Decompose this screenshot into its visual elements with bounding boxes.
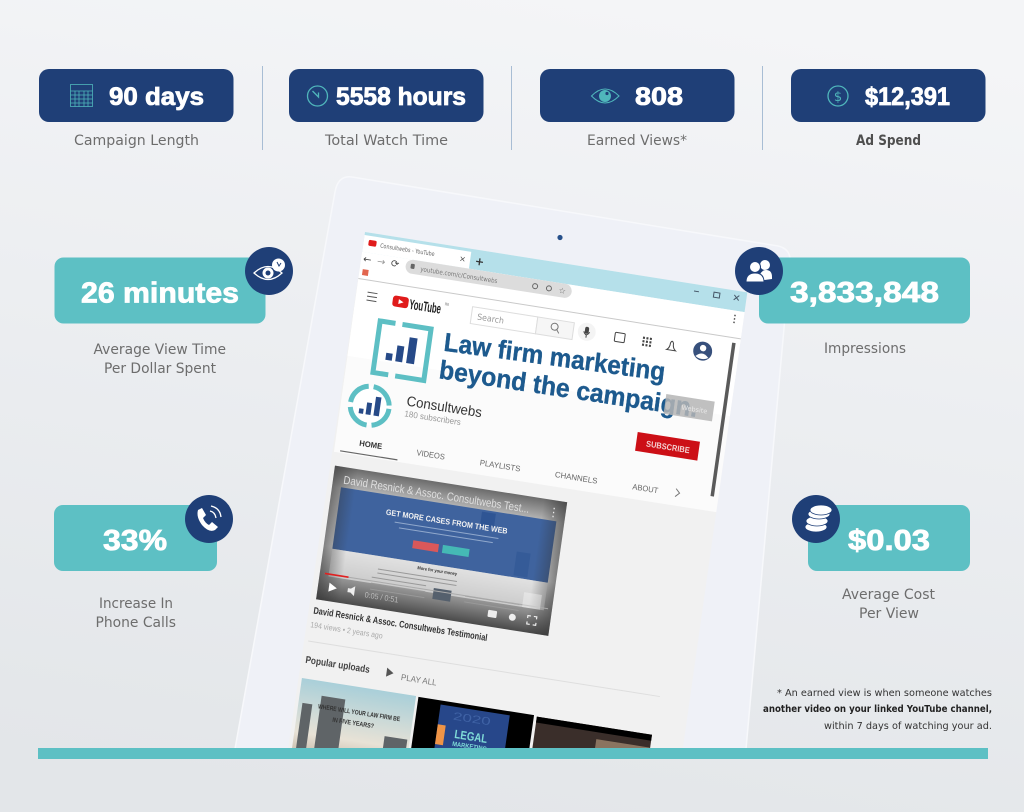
metric: impressions xyxy=(735,247,970,357)
metric: phone calls: Increase In xyxy=(99,596,173,612)
channel tabs: ABOUT xyxy=(632,482,659,495)
banner logo xyxy=(373,321,431,380)
metric: phone calls xyxy=(54,495,233,631)
stat card: campaign length xyxy=(39,69,234,149)
stat card: earned views: 808 xyxy=(635,83,683,111)
metric: cost per view: Average Cost xyxy=(842,587,935,603)
camera dot xyxy=(557,235,563,240)
metric: phone calls: Phone Calls xyxy=(96,615,176,631)
popular uploads heading xyxy=(306,656,436,686)
youtube header xyxy=(358,278,741,361)
banner headline: Law firm marketing xyxy=(442,327,667,387)
bottom band xyxy=(38,748,988,759)
stat card: ad spend xyxy=(791,69,986,149)
channel banner: beyond the campaign. xyxy=(437,354,700,423)
browser chrome: + xyxy=(474,255,485,269)
browser chrome: → xyxy=(376,256,386,268)
icon: dollar coin xyxy=(828,86,848,106)
channel info: Website xyxy=(681,404,708,416)
icon: people xyxy=(735,247,783,295)
scrollbar xyxy=(710,343,736,497)
video title: David Resnick & Assoc. Consultwebs Testimonial xyxy=(313,606,488,644)
video thumbnails: MARKETING xyxy=(452,741,487,753)
metric: view time per dollar xyxy=(54,247,293,377)
metric: view time per dollar: Per Dollar Spent xyxy=(104,361,217,377)
youtube header: IN xyxy=(444,301,449,307)
video thumbnails: LEGAL xyxy=(454,727,488,746)
channel tabs xyxy=(340,440,680,497)
video thumbnails xyxy=(292,678,652,748)
icon: clock xyxy=(308,86,328,106)
video thumbnails: TRENDS xyxy=(450,747,481,761)
channel info xyxy=(348,384,715,461)
metric: phone calls: 33% xyxy=(103,525,167,557)
stat card: campaign length: Campaign Length xyxy=(74,133,199,149)
video player: David Resnick & Assoc. Consultwebs Test... xyxy=(343,475,530,516)
icon: calendar xyxy=(70,84,92,106)
channel tabs: HOME xyxy=(359,439,383,451)
video player: 0:05 / 0:51 xyxy=(364,590,399,605)
footnote: within 7 days of watching your ad. xyxy=(824,721,992,732)
popular uploads heading: PLAY ALL xyxy=(400,672,438,688)
channel tabs: VIDEOS xyxy=(416,448,445,462)
icon: phone xyxy=(185,495,233,543)
channel tabs: CHANNELS xyxy=(554,470,598,486)
stat card: ad spend: Ad Spend xyxy=(856,133,921,149)
channel info: SUBSCRIBE xyxy=(646,438,691,455)
icon: dollar coin: $ xyxy=(834,90,842,105)
video thumbnails: 2020 xyxy=(452,711,491,728)
video player: GET MORE CASES FROM THE WEB xyxy=(385,508,508,536)
channel info: 180 subscribers xyxy=(404,408,462,427)
footnote: another video on your linked YouTube channel, xyxy=(763,704,992,715)
channel info: Consultwebs xyxy=(406,393,483,420)
tablet device xyxy=(234,195,785,748)
metric: cost per view: $0.03 xyxy=(848,525,930,557)
metric: impressions: 3,833,848 xyxy=(790,277,939,309)
footnote: * An earned view is when someone watches xyxy=(777,688,992,699)
youtube header: YouTube xyxy=(408,296,442,317)
popular uploads heading: Popular uploads xyxy=(305,655,371,676)
browser chrome: × xyxy=(459,254,466,264)
metric: view time per dollar: Average View Time xyxy=(94,342,226,358)
browser chrome: youtube.com/c/Consultwebs xyxy=(420,265,498,285)
stat card: total watch time xyxy=(289,69,484,149)
stat card: total watch time: 5558 hours xyxy=(336,83,466,111)
youtube header: Search xyxy=(476,313,505,327)
stat card: campaign length: 90 days xyxy=(109,83,204,111)
channel banner xyxy=(370,318,696,418)
video thumbnails: WHERE WILL YOUR LAW FIRM BE xyxy=(318,703,401,723)
video player: More for your money xyxy=(417,565,458,576)
stat card: earned views xyxy=(540,69,734,149)
browser chrome: ☆ xyxy=(558,286,566,296)
stat card: ad spend: $12,391 xyxy=(865,83,950,111)
browser chrome: ← xyxy=(362,254,372,266)
footnote xyxy=(763,688,992,732)
channel tabs: PLAYLISTS xyxy=(479,458,521,474)
metric: impressions: Impressions xyxy=(824,341,906,357)
icon: coins xyxy=(792,495,840,543)
video meta: 194 views • 2 years ago xyxy=(310,620,384,641)
browser chrome: Consultwebs - YouTube xyxy=(380,243,435,258)
browser chrome xyxy=(362,232,748,324)
icon: eye with clock xyxy=(245,247,293,295)
metric: cost per view: Per View xyxy=(859,606,919,622)
stat card: earned views: Earned Views* xyxy=(587,133,687,149)
stat card: total watch time: Total Watch Time xyxy=(324,133,448,149)
browser window xyxy=(292,232,748,748)
icon: eye xyxy=(592,89,619,103)
browser chrome: ⟳ xyxy=(390,258,400,271)
video player xyxy=(316,466,567,636)
metric: cost per view xyxy=(792,495,970,622)
video thumbnails: IN FIVE YEARS? xyxy=(332,717,374,730)
metric: view time per dollar: 26 minutes xyxy=(81,278,239,310)
